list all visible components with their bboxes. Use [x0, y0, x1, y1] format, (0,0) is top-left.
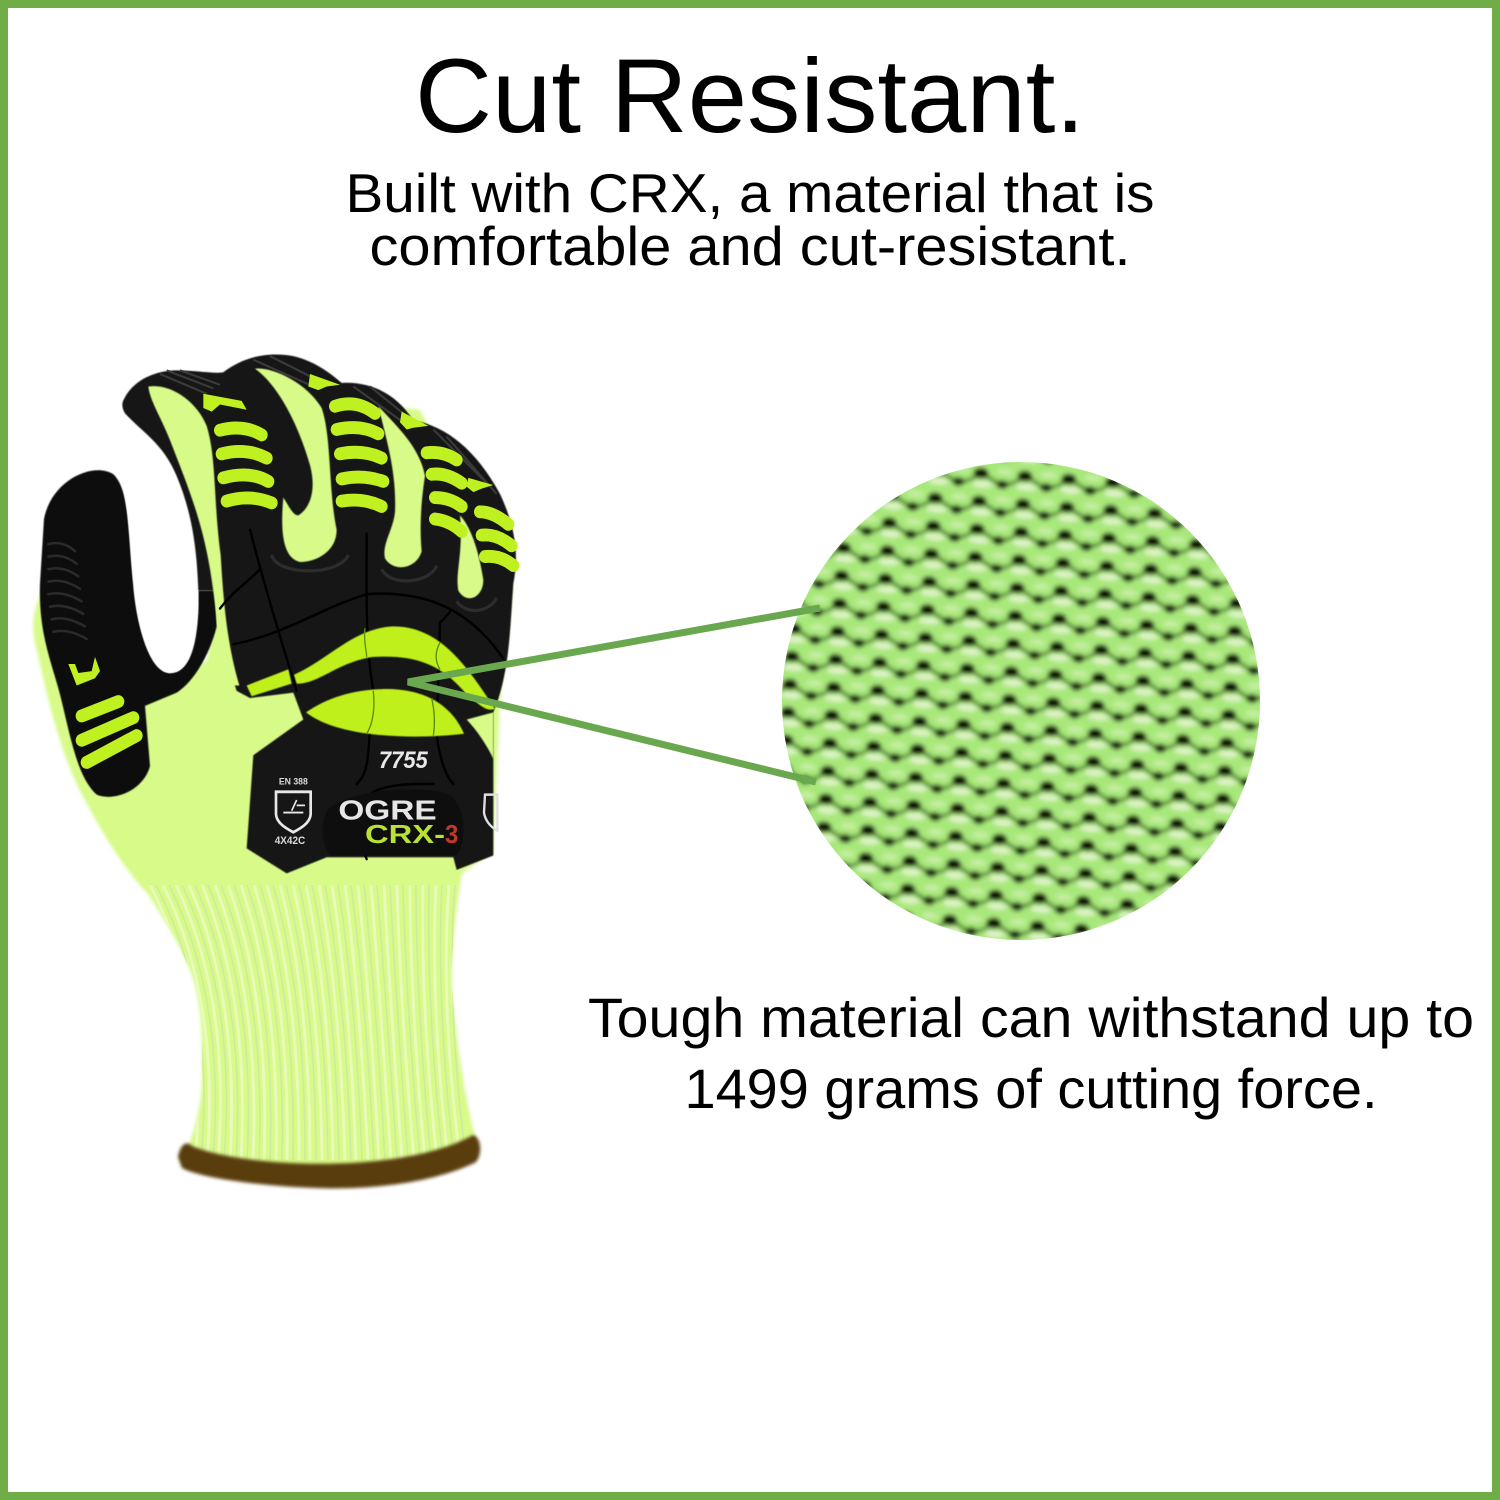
thumb ribs [48, 543, 87, 639]
middle finger gap [255, 369, 337, 562]
fingertip ridges [160, 356, 497, 494]
hand black padding [122, 355, 516, 873]
palm seam lines over neon [365, 628, 440, 736]
brown cuff hem [178, 1135, 480, 1188]
model text: 3 [445, 820, 458, 849]
knit close-up circle [770, 450, 1270, 950]
thumb and web black pad [40, 470, 217, 797]
brand panel [322, 789, 463, 856]
white gap between thumb and fingers [115, 413, 199, 673]
ring finger gap [378, 406, 425, 567]
certification badge: 4X42C [275, 836, 306, 847]
glove base silhouette [33, 376, 513, 1168]
neon finger bars [82, 404, 513, 762]
knuckle arcs [272, 555, 497, 610]
caption [588, 986, 1474, 1120]
title: Cut Resistant. [415, 38, 1085, 155]
subtitle: comfortable and cut-resistant. [370, 215, 1130, 277]
brand text: OGRE [338, 795, 437, 826]
wrist knit ribs [150, 885, 466, 1160]
right badge [484, 795, 497, 830]
panel seams [220, 530, 503, 859]
subtitle [346, 162, 1154, 277]
certification badge [275, 776, 311, 847]
caption: Tough material can withstand up to [588, 986, 1474, 1049]
caption: 1499 grams of cutting force. [684, 1057, 1378, 1120]
neon palm bands [247, 669, 292, 696]
neon fingertip tabs [68, 374, 493, 685]
subtitle: Built with CRX, a material that is [346, 162, 1154, 224]
glove illustration [33, 355, 516, 1188]
model number: 7755 [379, 746, 428, 773]
palm right light patch [467, 712, 493, 759]
model text: CRX- [365, 820, 445, 849]
callout lines [408, 608, 820, 782]
pinky finger gap [458, 515, 483, 598]
certification badge: EN 388 [279, 776, 308, 787]
index light strip [148, 386, 239, 685]
model text [365, 820, 458, 849]
